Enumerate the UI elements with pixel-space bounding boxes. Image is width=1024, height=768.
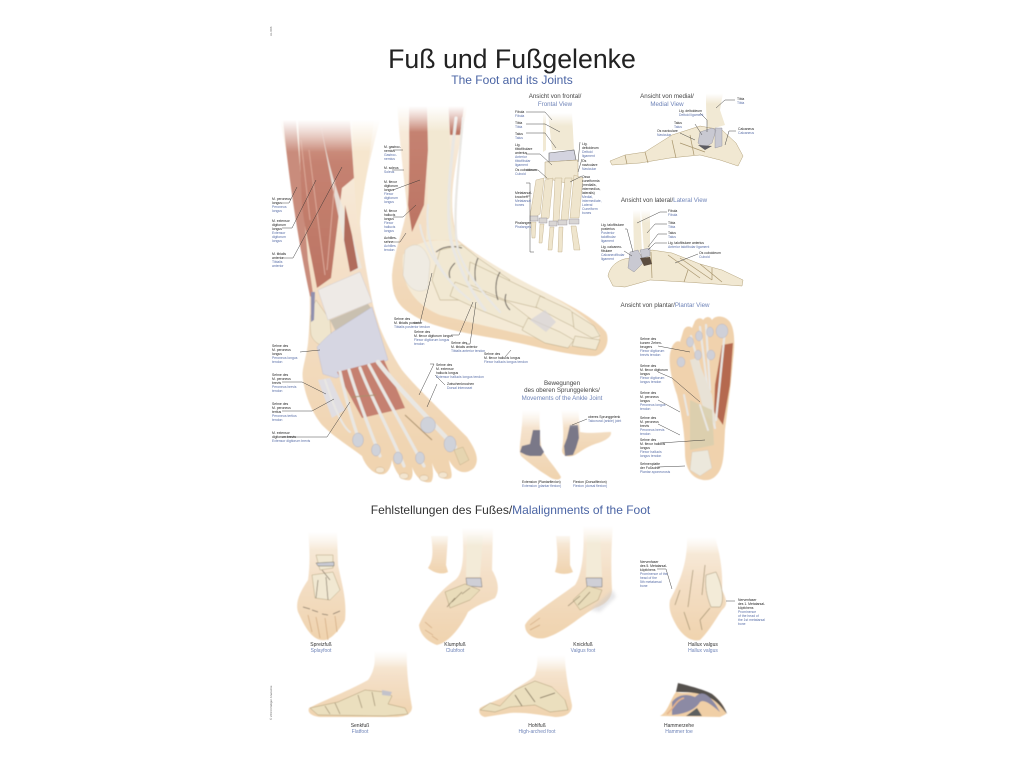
labels: frontal view: Tibia bbox=[515, 121, 522, 125]
labels: plantar view: M. peroneus bbox=[640, 420, 659, 424]
label: extensor digitorum longus: digitorum bbox=[272, 235, 286, 239]
labels: frontal view: Medial, bbox=[582, 195, 593, 199]
label: tendon peroneus longus: longus bbox=[272, 352, 282, 356]
caption: clubfoot: Clubfoot bbox=[446, 648, 465, 654]
ankle bones bbox=[310, 300, 332, 346]
labels: frontal view: Lateral bbox=[582, 203, 593, 207]
toe bones/joints bbox=[352, 417, 456, 464]
panel: movements of the ankle joint bbox=[518, 380, 621, 488]
tarsal bones bbox=[432, 245, 600, 350]
labels: frontal view: Fibula bbox=[515, 114, 524, 118]
labels: plantar view: longus bbox=[640, 399, 650, 403]
label: tibialis posterior tendon bbox=[394, 317, 430, 329]
labels: lateral view: Cuboid bbox=[699, 255, 710, 259]
label: flexor digitorum tendon: Sehne des bbox=[414, 330, 431, 334]
labels: plantar view: Peroneus brevis bbox=[640, 428, 665, 432]
labels: lateral view: Calcaneofibular bbox=[601, 253, 625, 257]
label: gastrocnemius bbox=[384, 145, 401, 161]
label: extensor digitorum longus: longus bbox=[272, 227, 282, 231]
labels: plantar view: Flexor digitorum bbox=[640, 376, 664, 380]
label: tendon peroneus brevis bbox=[272, 373, 297, 393]
labels: frontal view: Deltoid bbox=[582, 150, 593, 154]
labels: medial view: Tibia bbox=[737, 97, 744, 101]
labels: lateral view: fibulare bbox=[601, 249, 612, 253]
panel: plantar view bbox=[621, 302, 734, 480]
labels: hallux valgus: des 5. Metatarsal- bbox=[640, 564, 667, 568]
labels: main foot illustrations bbox=[272, 145, 528, 443]
labels: frontal view: ligament bbox=[515, 163, 528, 167]
labels: frontal view: naviculare bbox=[582, 163, 598, 167]
icon: extension foot bbox=[520, 405, 561, 480]
labels: lateral view: talofibular bbox=[601, 235, 617, 239]
labels: frontal view: Ossa bbox=[582, 175, 590, 179]
labels: frontal view: Navicular bbox=[582, 167, 597, 171]
label: tendon extensor hallucis bbox=[436, 363, 484, 379]
caption: hallux valgus: Hallux valgus bbox=[688, 648, 718, 654]
labels: lateral view: Tibia bbox=[668, 225, 675, 229]
caption: flatfoot: Flatfoot bbox=[352, 729, 369, 735]
panel: hammer toe bbox=[660, 683, 727, 735]
label: tendon peroneus longus: tendon bbox=[272, 360, 282, 364]
labels: frontal view: Cuboid bbox=[515, 172, 526, 176]
label: flexor hallucis: hallucis bbox=[384, 225, 396, 229]
label: flexor hallucis: Flexor bbox=[384, 221, 394, 225]
label: dorsal interossei: Dorsal interossei bbox=[447, 386, 472, 390]
illustration: anterior foot bbox=[268, 102, 477, 482]
label: tibialis anterior tendon: Tibialis anterior tendon bbox=[451, 349, 485, 353]
labels: movements: Extension (Plantarflexion) bbox=[522, 480, 561, 484]
labels: plantar view: M. flexor hallucis bbox=[640, 442, 666, 446]
labels: medial view: Lig. deltoideum bbox=[679, 109, 702, 113]
labels: plantar view: longus bbox=[640, 446, 650, 450]
labels: plantar view: Sehne des bbox=[640, 416, 657, 420]
caption: valgus foot bbox=[571, 642, 596, 654]
labels: lateral view: Lig. talofibulare anterius bbox=[668, 241, 704, 245]
labels: medial view: Tibia bbox=[737, 101, 744, 105]
labels: movements: Talocrural (ankle) joint bbox=[588, 419, 621, 423]
label: achilles tendon: sehne bbox=[384, 240, 393, 244]
label: extensor digitorum brevis: M. extensor bbox=[272, 431, 291, 435]
label: flexor digitorum tendon: tendon bbox=[414, 342, 424, 346]
labels: plantar view: Sehnenplatte bbox=[640, 462, 660, 466]
title: Fuß und Fußgelenke bbox=[388, 44, 636, 74]
labels: frontal view: tibiofibular bbox=[515, 159, 531, 163]
labels: frontal view: tibiofibulare bbox=[515, 147, 532, 151]
label: gastrocnemius: Gastroc- bbox=[384, 153, 397, 157]
labels: hallux valgus: bone bbox=[640, 584, 648, 588]
labels: plantar view: M. flexor digitorum bbox=[640, 368, 668, 372]
label: extensor digitorum longus bbox=[272, 219, 291, 243]
labels: plantar view: Sehne des bbox=[640, 364, 657, 368]
labels: lateral view: Tibia bbox=[668, 221, 675, 225]
labels: medial view: Navicular bbox=[657, 133, 672, 137]
label: flexor hallucis: longus bbox=[384, 229, 394, 233]
labels: frontal view: Fibula bbox=[515, 110, 524, 114]
label: gastrocnemius: M. gastroc- bbox=[384, 145, 401, 149]
label: flexor digitorum: longus bbox=[384, 200, 394, 204]
label: tendon peroneus tertius: Peroneus tertius bbox=[272, 414, 297, 418]
caption: splayfoot: Spreizfuß bbox=[310, 642, 332, 648]
labels: plantar view: M. peroneus bbox=[640, 395, 659, 399]
illustration: plantar foot bbox=[670, 316, 734, 480]
label: tendon peroneus brevis: Peroneus brevis bbox=[272, 385, 297, 389]
heel tissue bbox=[403, 245, 430, 291]
illustration: frontal skeleton bbox=[530, 113, 583, 252]
illustration: valgus foot bbox=[525, 524, 613, 638]
title: The Foot and its Joints bbox=[451, 73, 573, 87]
label: tendon peroneus longus bbox=[272, 344, 298, 364]
labels: plantar view: kurzen Zehen- bbox=[640, 341, 662, 345]
label: flexor digitorum tendon: M. flexor digitorum longus bbox=[414, 334, 453, 338]
labels: lateral view: Fibula bbox=[668, 213, 677, 217]
label: tendon peroneus brevis: tendon bbox=[272, 389, 282, 393]
labels: hallux valgus: of the head of bbox=[738, 614, 759, 618]
heading: plantar view: Ansicht von plantar/Plantar View bbox=[621, 302, 710, 309]
caption: flatfoot: Senkfuß bbox=[351, 723, 369, 729]
labels: frontal view: Os bbox=[582, 159, 587, 163]
heading: movements bbox=[522, 380, 603, 402]
panel: flatfoot bbox=[309, 642, 412, 735]
label: gastrocnemius: nemius bbox=[384, 149, 395, 153]
label: peroneus longus: longus bbox=[272, 201, 282, 205]
label: extensor digitorum brevis: Extensor digitorum brevis bbox=[272, 439, 311, 443]
labels: plantar view: tendon bbox=[640, 432, 650, 436]
label: flexor digitorum: Flexor bbox=[384, 192, 394, 196]
label: flexor digitorum: digitorum bbox=[384, 196, 398, 200]
labels: plantar view: Sehne des bbox=[640, 438, 657, 442]
labels: lateral view: Talus bbox=[668, 235, 676, 239]
labels: plantar view: longus bbox=[640, 372, 650, 376]
labels: hallux valgus: the 1st metatarsal bbox=[738, 618, 765, 622]
labels: medial view: Talus bbox=[674, 125, 682, 129]
labels: movements: Flexion (dorsal flexion) bbox=[573, 484, 607, 488]
illustration: medial skeleton bbox=[610, 93, 743, 166]
labels: frontal view: intermedius, bbox=[582, 187, 601, 191]
label: extensor digitorum brevis: digitorum brevis bbox=[272, 435, 296, 439]
label: peroneus longus: Peroneus bbox=[272, 205, 287, 209]
label: extensor digitorum longus: digitorum bbox=[272, 223, 286, 227]
illustration: high-arched foot bbox=[479, 654, 572, 717]
illustration: flatfoot bbox=[309, 650, 412, 717]
labels: lateral view: Fibula bbox=[668, 209, 677, 213]
labels: frontal view: Os cuboideum bbox=[515, 168, 537, 172]
labels: frontal view: bones bbox=[515, 203, 525, 207]
label: achilles tendon: tendon bbox=[384, 248, 394, 252]
label: tibialis posterior tendon: Tibialis posterior tendon bbox=[394, 325, 430, 329]
caption: high-arched foot: High-arched foot bbox=[519, 729, 556, 735]
label: tendon peroneus longus: M. peroneus bbox=[272, 348, 291, 352]
pale midfoot base bbox=[403, 240, 600, 347]
heading: frontal view: Ansicht von frontal/ bbox=[529, 93, 582, 100]
labels: plantar view: der Fußsohle bbox=[640, 466, 660, 470]
label: tendon peroneus brevis: brevis bbox=[272, 381, 281, 385]
label: tendon peroneus tertius: Sehne des bbox=[272, 402, 289, 406]
labels: medial view: Calcaneus bbox=[738, 127, 754, 131]
label: tendon peroneus tertius: tertius bbox=[272, 410, 282, 414]
labels: plantar view: beugers bbox=[640, 345, 653, 349]
labels: plantar view: Sehne des bbox=[640, 337, 657, 341]
heading: medial view bbox=[640, 93, 694, 108]
label: flexor hallucis: longus bbox=[384, 217, 394, 221]
heading: medial view: Medial View bbox=[650, 101, 684, 108]
labels: frontal view: (medialis, bbox=[582, 183, 597, 187]
label: dorsal interossei bbox=[447, 382, 474, 390]
labels: plantar view: tendon bbox=[640, 407, 650, 411]
panel: lateral view bbox=[601, 197, 743, 287]
muscles bbox=[408, 100, 428, 232]
upper retinaculum bbox=[318, 272, 372, 320]
label: tendon peroneus tertius: tendon bbox=[272, 418, 282, 422]
label: flexor digitorum tendon bbox=[414, 330, 453, 346]
label: tendon peroneus tertius bbox=[272, 402, 297, 422]
illustration: hammer toe bbox=[660, 683, 727, 717]
label: achilles tendon: Achilles bbox=[384, 244, 396, 248]
label: tibialis anterior tendon bbox=[451, 341, 485, 353]
caption: splayfoot bbox=[310, 642, 332, 654]
caption: clubfoot: Klumpfuß bbox=[444, 642, 466, 648]
labels: frontal view: Cuneiform bbox=[582, 207, 598, 211]
labels: frontal view: Lig. bbox=[515, 143, 521, 147]
labels: medial view: Deltoid ligament bbox=[679, 113, 703, 117]
illustration: lateral foot bbox=[390, 92, 608, 356]
labels: plantar view bbox=[640, 337, 705, 474]
label: tendon extensor hallucis: Extensor hallucis longus tendon bbox=[436, 375, 484, 379]
labels: lateral view: posterius bbox=[601, 227, 615, 231]
illustration: splayfoot bbox=[297, 530, 345, 640]
labels: frontal view: bones bbox=[582, 211, 592, 215]
labels: plantar view: Sehne des bbox=[640, 391, 657, 395]
caption: hallux valgus: Hallux valgus bbox=[688, 642, 718, 648]
labels: medial view: Os naviculare bbox=[657, 129, 678, 133]
lateral tendon sheath bbox=[318, 378, 345, 418]
label: tibialis anterior tendon: M. tibialis anterior bbox=[451, 345, 478, 349]
heading: lateral view: Ansicht von lateral/Lateral View bbox=[621, 197, 708, 204]
foot dorsum muscle red bbox=[337, 360, 405, 418]
title bbox=[388, 44, 636, 87]
label: flexor hallucis tendon: Flexor hallucis longus tendon bbox=[484, 360, 528, 364]
labels: hallux valgus: 5th metatarsal bbox=[640, 580, 662, 584]
label: soleus: M. soleus bbox=[384, 166, 399, 170]
label: tendon extensor hallucis: hallucis longus bbox=[436, 371, 459, 375]
labels: frontal view: Talus bbox=[515, 132, 523, 136]
labels: frontal view: Phalangen bbox=[515, 221, 531, 225]
labels: lateral view: Os cuboideum bbox=[699, 251, 721, 255]
heading: medial view: Ansicht von medial/ bbox=[640, 93, 694, 100]
label: flexor hallucis: M. flexor bbox=[384, 209, 398, 213]
labels: lateral view: Posterior bbox=[601, 231, 615, 235]
label: peroneus longus: longus bbox=[272, 209, 282, 213]
label: flexor digitorum: longus bbox=[384, 188, 394, 192]
caption: splayfoot: Splayfoot bbox=[311, 648, 332, 654]
labels: frontal view: lateralis) bbox=[582, 191, 595, 195]
labels: frontal view: knochen bbox=[515, 195, 528, 199]
labels: lateral view: Lig. calcaneo- bbox=[601, 245, 622, 249]
label: tibialis anterior: Tibialis bbox=[272, 260, 283, 264]
illustration: clubfoot bbox=[419, 526, 498, 645]
label: extensor digitorum longus: M. extensor bbox=[272, 219, 291, 223]
panel: splayfoot bbox=[297, 522, 345, 654]
labels: hallux valgus: des 1. Metatarsal- bbox=[738, 602, 765, 606]
label: tendon extensor hallucis: M. extensor bbox=[436, 367, 455, 371]
caption: valgus foot: Knickfuß bbox=[573, 642, 593, 648]
labels: plantar view: Flexor hallucis bbox=[640, 450, 662, 454]
labels: medial view bbox=[657, 97, 754, 145]
labels: movements bbox=[522, 415, 621, 488]
labels: hallux valgus: köpfchens bbox=[738, 606, 754, 610]
heading: frontal view bbox=[529, 93, 582, 108]
heading: movements: des oberen Sprunggelenks/ bbox=[524, 387, 600, 394]
labels: plantar view: longus tendon bbox=[640, 380, 661, 384]
caption: flatfoot bbox=[351, 723, 369, 735]
illustration: lateral skeleton bbox=[608, 208, 743, 287]
label: flexor hallucis tendon: M. flexor hallucis longus bbox=[484, 356, 520, 360]
panel: hallux valgus bbox=[640, 528, 765, 654]
labels: frontal view: Phalanges bbox=[515, 225, 531, 229]
labels: lateral view bbox=[601, 209, 721, 263]
panel: high-arched foot bbox=[479, 646, 572, 735]
labels: hallux valgus bbox=[640, 560, 765, 626]
labels: lateral view: Anterior talofibular ligament bbox=[668, 245, 709, 249]
labels: frontal view: Anterior bbox=[515, 155, 528, 159]
label: flexor hallucis: hallucis bbox=[384, 213, 396, 217]
copyright note: © 2014 Rüdiger Anatomie bbox=[269, 685, 273, 720]
label: flexor digitorum tendon: Flexor digitorum longus bbox=[414, 338, 450, 342]
label: tendon extensor hallucis: Sehne des bbox=[436, 363, 453, 367]
labels: plantar view: Plantar aponeurosis bbox=[640, 470, 670, 474]
label: dorsal interossei: Zwischenknochen bbox=[447, 382, 474, 386]
panel: medial view bbox=[610, 88, 754, 166]
labels: medial view: Calcaneus bbox=[738, 131, 754, 135]
heading: movements: Bewegungen bbox=[544, 380, 581, 387]
heading: frontal view: Frontal View bbox=[538, 101, 573, 108]
label: tendon peroneus brevis: Sehne des bbox=[272, 373, 289, 377]
labels: lateral view: ligament bbox=[601, 257, 614, 261]
label: tibialis posterior tendon: Sehne des bbox=[394, 317, 411, 321]
label: gastrocnemius: nemius bbox=[384, 157, 395, 161]
pale shin edge bbox=[352, 120, 374, 230]
labels: hallux valgus: Prominence bbox=[738, 610, 756, 614]
label: soleus: Soleus bbox=[384, 170, 395, 174]
label: tendon peroneus longus: Sehne des bbox=[272, 344, 289, 348]
label: soleus bbox=[384, 166, 399, 174]
labels: movements: oberes Sprunggelenk bbox=[588, 415, 621, 419]
label: extensor digitorum longus: Extensor bbox=[272, 231, 286, 235]
panel: clubfoot bbox=[419, 518, 498, 654]
caption: hammer toe: Hammer toe bbox=[665, 729, 693, 735]
label: flexor hallucis tendon: Sehne des bbox=[484, 352, 501, 356]
illustration: clubfoot small bbox=[428, 536, 448, 573]
labels: frontal view: Lig. bbox=[582, 142, 588, 146]
labels: hallux valgus: bone bbox=[738, 622, 746, 626]
label: flexor digitorum: digitorum bbox=[384, 184, 398, 188]
panel: frontal view bbox=[515, 93, 602, 252]
extensor tendons bbox=[325, 362, 455, 466]
caption: high-arched foot bbox=[519, 723, 556, 735]
label: extensor digitorum brevis bbox=[272, 431, 311, 443]
caption: clubfoot bbox=[444, 642, 466, 654]
caption: hammer toe bbox=[664, 723, 694, 735]
label: tendon peroneus tertius: M. peroneus bbox=[272, 406, 291, 410]
labels: plantar view: Flexor digitorum bbox=[640, 349, 664, 353]
label: tendon peroneus longus: Peroneus longus bbox=[272, 356, 298, 360]
labels: frontal view: anterius bbox=[515, 151, 527, 155]
label: flexor hallucis tendon bbox=[484, 352, 528, 364]
label: tibialis anterior bbox=[272, 252, 286, 268]
illustration: hallux valgus bbox=[669, 536, 726, 640]
labels: hallux valgus: Nervenfaser bbox=[738, 598, 757, 602]
label: tibialis anterior tendon: Sehne des bbox=[451, 341, 468, 345]
labels: lateral view: ligament bbox=[601, 239, 614, 243]
muscles: lower leg bbox=[283, 120, 362, 300]
label: flexor hallucis bbox=[384, 209, 398, 233]
labels: medial view: Talus bbox=[674, 121, 682, 125]
heading: movements: Movements of the Ankle Joint bbox=[522, 395, 603, 402]
labels: hallux valgus: köpfchens bbox=[640, 568, 656, 572]
labels: frontal view: Tibia bbox=[515, 125, 522, 129]
labels: frontal view: intermediate, bbox=[582, 199, 602, 203]
lower retinaculum bbox=[317, 307, 388, 378]
labels: plantar view: brevis bbox=[640, 424, 649, 428]
labels: lateral view: Talus bbox=[668, 231, 676, 235]
labels: frontal view: cuneiformia bbox=[582, 179, 600, 183]
labels: hallux valgus: head of the bbox=[640, 576, 657, 580]
icon: flexion foot bbox=[560, 403, 611, 456]
label: tibialis anterior: anterior bbox=[272, 264, 284, 268]
label: peroneus longus: M. peroneus bbox=[272, 197, 291, 201]
labels: hallux valgus: Nervenfaser bbox=[640, 560, 659, 564]
labels: plantar view: Peroneus longus bbox=[640, 403, 666, 407]
caption: hallux valgus bbox=[688, 642, 718, 654]
labels: frontal view: deltoideum bbox=[582, 146, 599, 150]
panel: valgus foot bbox=[525, 516, 616, 654]
label: achilles tendon: Achilles- bbox=[384, 236, 397, 240]
sheet number: AL 006 bbox=[269, 26, 273, 36]
labels: plantar view: brevis tendon bbox=[640, 353, 660, 357]
peroneal & flexor tendons bbox=[420, 118, 500, 312]
label: flexor digitorum bbox=[384, 180, 398, 204]
labels: frontal view bbox=[515, 110, 602, 252]
label: tibialis anterior: M. tibialis bbox=[272, 252, 286, 256]
labels: frontal view: Metatarsal- bbox=[515, 191, 532, 195]
caption: valgus foot: Valgus foot bbox=[571, 648, 596, 654]
illustration: valgus small bbox=[555, 536, 573, 574]
caption: high-arched foot: Hohlfuß bbox=[528, 723, 546, 729]
labels: movements: Flexion (Dorsalflexion) bbox=[573, 480, 607, 484]
label: flexor digitorum: M. flexor bbox=[384, 180, 398, 184]
label: tibialis posterior tendon: M. tibialis posterior bbox=[394, 321, 423, 325]
labels: movements: Extension (plantar flexion) bbox=[522, 484, 561, 488]
labels: plantar view: longus tendon bbox=[640, 454, 661, 458]
caption: hammer toe: Hammerzehe bbox=[664, 723, 694, 729]
labels: hallux valgus: Prominence of the bbox=[640, 572, 668, 576]
label: tibialis anterior: anterior bbox=[272, 256, 284, 260]
label: achilles tendon bbox=[384, 236, 397, 252]
label: extensor digitorum longus: longus bbox=[272, 239, 282, 243]
labels: frontal view: ligament bbox=[582, 154, 595, 158]
label: tendon peroneus brevis: M. peroneus bbox=[272, 377, 291, 381]
labels: lateral view: Lig. talofibulare bbox=[601, 223, 624, 227]
label: peroneus longus bbox=[272, 197, 291, 213]
labels: frontal view: Metatarsal bbox=[515, 199, 531, 203]
heading: malalignments: Fehlstellungen des Fußes/Malalignments of the Foot bbox=[371, 503, 651, 517]
labels: frontal view: Talus bbox=[515, 136, 523, 140]
